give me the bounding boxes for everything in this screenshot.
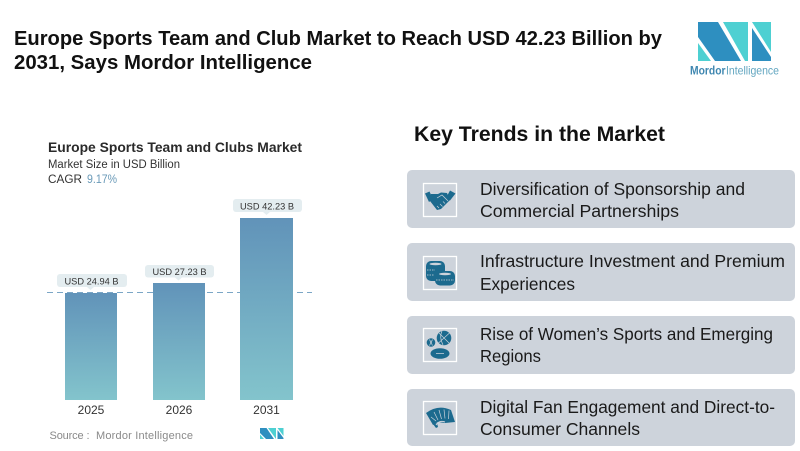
heading: key trends: Key Trends in the Market [414, 122, 665, 146]
trend 1 text [480, 179, 745, 221]
chart subtitle: Market Size in USD Billion [48, 159, 180, 171]
trend 3 text: Rise of Women’s Sports and Emerging [480, 324, 773, 344]
label 2031 [233, 199, 302, 215]
chart: market size bar chart [47, 140, 312, 442]
trend 3 text [480, 324, 773, 366]
trend 1 text: Commercial Partnerships [480, 201, 679, 221]
panel: trend 4 [407, 389, 795, 446]
source: Source : [50, 430, 90, 442]
trend 3 text: Regions [480, 346, 541, 366]
panel: trend 3 [407, 316, 795, 374]
logo: Mordor Intelligence [690, 22, 779, 78]
label 2031: USD 42.23 B [240, 202, 294, 212]
small logo [260, 428, 284, 439]
year 2026: 2026 [166, 403, 193, 417]
panel: trend 2 [407, 243, 795, 301]
reference line [47, 292, 312, 294]
label 2026 [145, 265, 214, 280]
bar 2026 [153, 283, 205, 400]
title: Europe Sports Team and Club Market to Reach USD 42.23 Billion by [14, 28, 663, 50]
logo: Mordor Intelligence: Mordor [690, 64, 726, 78]
trend 4 text [480, 397, 775, 439]
bar 2031 [240, 218, 293, 400]
trend 2 text: Infrastructure Investment and Premium [480, 251, 785, 271]
icon: coins [424, 256, 456, 290]
year 2031: 2031 [253, 403, 280, 417]
label 2025 [57, 274, 127, 290]
CAGR: CAGR [48, 174, 82, 186]
year 2025: 2025 [78, 403, 105, 417]
trend 4 text: Digital Fan Engagement and Direct-to- [480, 397, 775, 417]
label 2025: USD 24.94 B [64, 276, 118, 288]
trend 2 text: Experiences [480, 274, 575, 294]
title: 2031, Says Mordor Intelligence [14, 52, 312, 74]
panel: trend 1 [407, 170, 795, 228]
icon: sports balls [424, 328, 456, 362]
trend 1 text: Diversification of Sponsorship and [480, 179, 745, 199]
trend 4 text: Consumer Channels [480, 419, 640, 439]
chart title: Europe Sports Team and Clubs Market [48, 140, 303, 155]
source [50, 430, 193, 442]
icon: handshake [424, 184, 456, 216]
trend 2 text [480, 251, 785, 294]
logo: Mordor Intelligence: Intelligence [726, 64, 779, 78]
CAGR [48, 174, 117, 186]
title [14, 28, 663, 74]
label 2026: USD 27.23 B [152, 267, 206, 278]
CAGR: 9.17% [87, 174, 117, 186]
bar 2025 [65, 293, 117, 400]
icon: fan [424, 402, 456, 434]
source: Mordor Intelligence [96, 430, 193, 442]
